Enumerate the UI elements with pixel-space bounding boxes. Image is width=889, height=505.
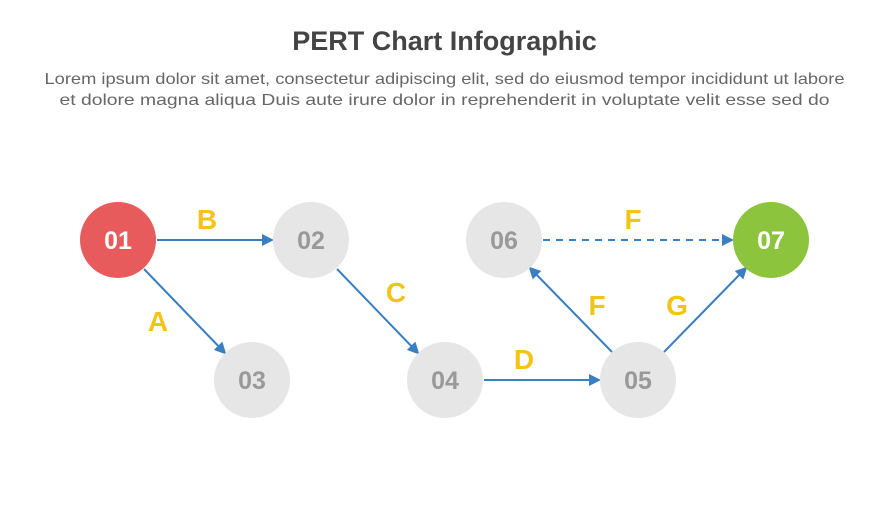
- subtitle: [44, 71, 845, 109]
- arrow labels: G: [666, 290, 688, 321]
- subtitle: Lorem ipsum dolor sit amet, consectetur adipiscing elit, sed do eiusmod tempor incididunt ut labore: [44, 71, 845, 88]
- arrow labels: [148, 204, 688, 375]
- nodes: 07: [757, 227, 785, 255]
- arrow labels: B: [197, 204, 217, 235]
- nodes: 02: [297, 227, 325, 255]
- nodes: 04: [431, 367, 459, 395]
- nodes: 05: [624, 367, 652, 395]
- nodes: [80, 202, 809, 418]
- nodes: 03: [238, 367, 266, 395]
- nodes: 01: [104, 227, 132, 255]
- arrow labels: F: [588, 290, 606, 321]
- arrow labels: C: [386, 277, 406, 308]
- subtitle: et dolore magna aliqua Duis aute irure dolor in reprehenderit in voluptate velit esse sed do: [60, 92, 830, 109]
- arrow labels: D: [514, 344, 534, 375]
- arrow labels: A: [148, 306, 168, 337]
- nodes: 06: [490, 227, 518, 255]
- title: PERT Chart Infographic: [292, 26, 597, 56]
- arrows: [144, 240, 746, 380]
- arrow labels: F: [624, 204, 642, 235]
